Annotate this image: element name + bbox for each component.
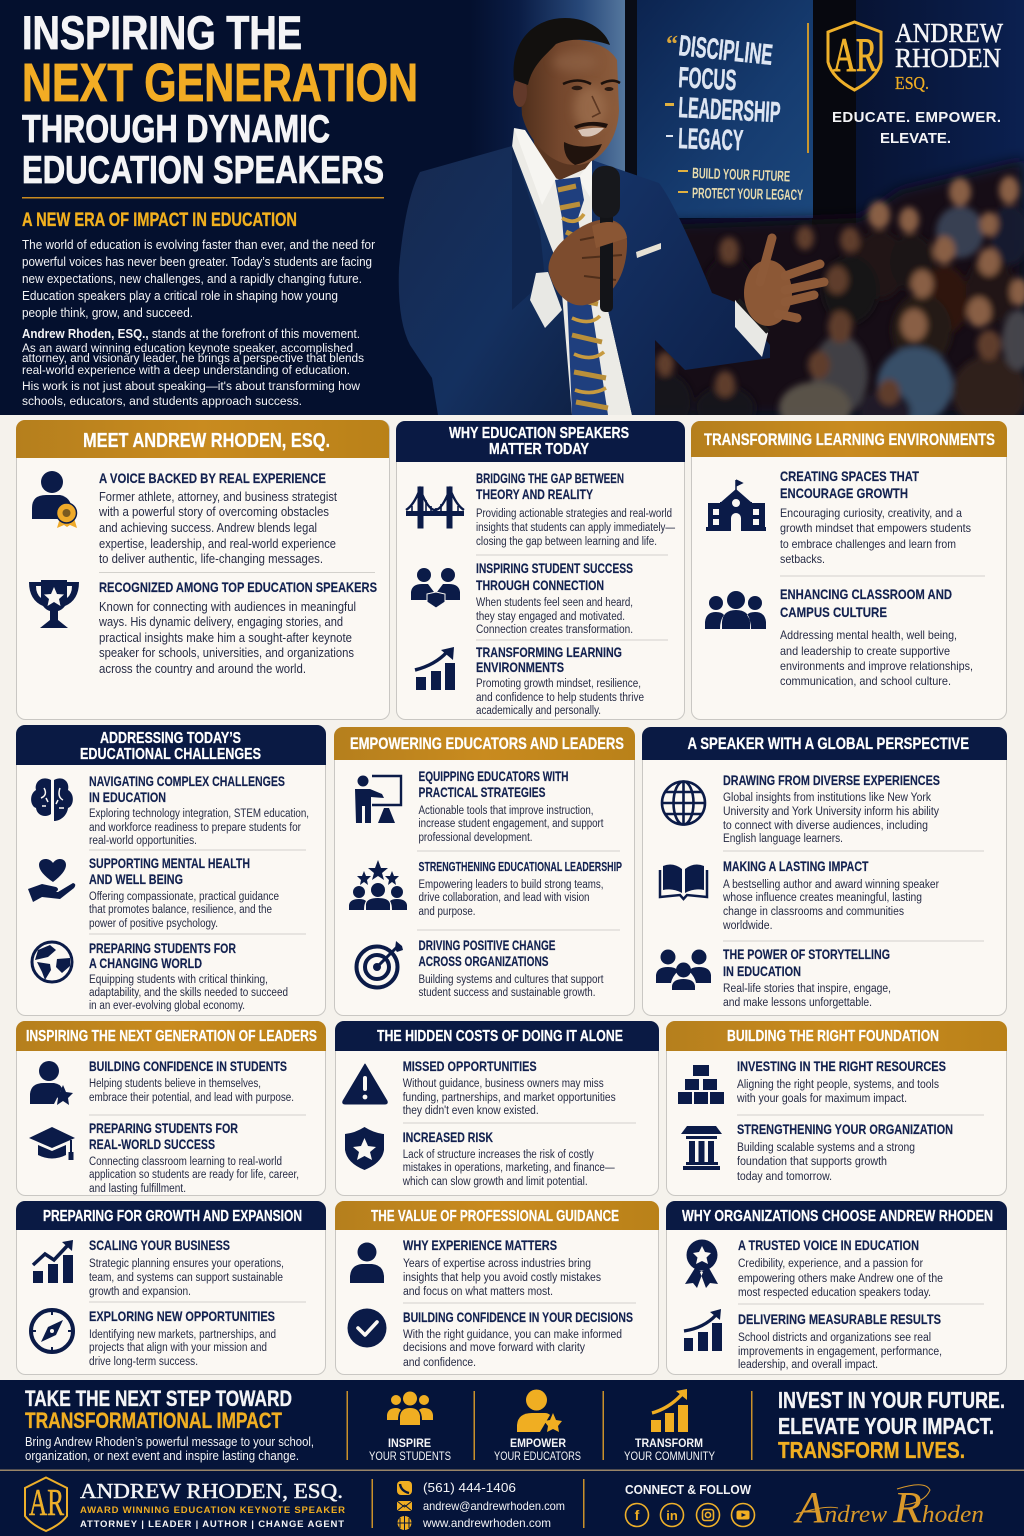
item: bridging the gap: closing the gap between learning and life. xyxy=(476,536,657,548)
item: equipping educators: EQUIPPING EDUCATORS WITH xyxy=(418,769,568,784)
item: increased risk: INCREASED RISK xyxy=(403,1130,493,1145)
item: supporting mental health xyxy=(89,856,279,930)
item: exploring new opportunities: Identifying new markets, partnerships, and xyxy=(89,1329,276,1341)
hero intro text: As an award winning education keynote speaker, accomplished xyxy=(22,341,353,355)
closing slogan: TRANSFORM LIVES. xyxy=(778,1437,965,1463)
item: navigating complex challenges: real-world opportunities. xyxy=(89,835,197,847)
item: recognized among top speakers: Known for connecting with audiences in meaningful xyxy=(99,600,356,614)
panel: addressing today's educational challenges: ADDRESSING TODAY’S xyxy=(100,730,241,747)
item: exploring new opportunities: projects that align with your mission and xyxy=(89,1342,267,1354)
item: bridging the gap: insights that students can apply immediately— xyxy=(476,522,675,534)
panel: preparing for growth and expansion: PREPARING FOR GROWTH AND EXPANSION xyxy=(43,1208,302,1225)
presentation screen: LEADERSHIP xyxy=(678,92,781,129)
item: exploring new opportunities: EXPLORING NEW OPPORTUNITIES xyxy=(89,1309,275,1324)
icon: brain xyxy=(31,778,73,821)
item: preparing for real-world success: Connecting classroom learning to real-world xyxy=(89,1156,282,1168)
item: supporting mental health: AND WELL BEING xyxy=(89,872,183,887)
title: INSPIRING THE xyxy=(22,6,302,59)
item: drawing from diverse experiences: English language learners. xyxy=(723,833,843,845)
item: strengthening your organization: today and tomorrow. xyxy=(737,1171,832,1183)
item: a voice backed by real experience: with a powerful story of overcoming obstacles xyxy=(98,505,329,519)
item: increased risk: Lack of structure increases the risk of costly xyxy=(403,1149,594,1161)
item: investing in the right resources: INVESTING IN THE RIGHT RESOURCES xyxy=(737,1059,946,1074)
item: transforming learning environments: Promoting growth mindset, resilience, xyxy=(476,678,641,690)
item: strengthening your organization: foundation that supports growth xyxy=(737,1156,887,1168)
item: strengthening educational leadership xyxy=(418,859,622,918)
item: a voice backed by real experience: to deliver authentic, life-changing messages. xyxy=(99,552,323,566)
item: the power of storytelling: and make lessons unforgettable. xyxy=(723,997,872,1009)
item: making a lasting impact: change in classrooms and communities xyxy=(723,906,904,918)
item: delivering measurable results: leadership, and overall impact. xyxy=(738,1359,878,1371)
panel: why education speakers matter today: WHY EDUCATION SPEAKERS xyxy=(449,425,629,442)
item: enhancing classroom: Addressing mental health, well being, xyxy=(780,628,957,642)
hero intro text: Education speakers play a critical role in shaping how young xyxy=(22,288,338,303)
inspire your students xyxy=(369,1392,451,1463)
item: recognized among top speakers: across the country and around the world. xyxy=(99,662,306,676)
hero intro text: Andrew Rhoden, ESQ., stands at the forefront of this movement. xyxy=(22,326,360,341)
item: making a lasting impact xyxy=(722,859,939,932)
empower your educators: YOUR EDUCATORS xyxy=(494,1449,581,1463)
item: the power of storytelling: Real-life stories that inspire, engage, xyxy=(723,983,891,995)
item: navigating complex challenges: NAVIGATING COMPLEX CHALLENGES xyxy=(89,774,285,789)
social links: in xyxy=(666,1508,678,1523)
item: creating spaces: Encouraging curiosity, creativity, and a xyxy=(780,506,962,520)
icon: three people xyxy=(705,591,766,629)
footer bar xyxy=(0,1470,1024,1536)
item: equipping educators: PRACTICAL STRATEGIES xyxy=(418,785,546,800)
brand logo block: RHODEN xyxy=(895,43,1001,73)
item: delivering measurable results: improvements in engagement, performance, xyxy=(738,1346,942,1358)
item: building confidence in your decisions: and confidence. xyxy=(403,1357,476,1369)
icon: graduation cap xyxy=(29,1127,75,1160)
inspire your students: YOUR STUDENTS xyxy=(369,1449,451,1463)
item: making a lasting impact: A bestselling author and award winning speaker xyxy=(723,879,939,891)
item: supporting mental health: power of positive psychology. xyxy=(89,918,218,930)
item: enhancing classroom: ENHANCING CLASSROOM AND xyxy=(780,586,952,602)
icon: check circle xyxy=(348,1308,386,1348)
empower your educators: EMPOWER xyxy=(510,1436,566,1450)
item: preparing students for a changing world: PREPARING STUDENTS FOR xyxy=(89,941,236,956)
panel: a speaker with a global perspective xyxy=(642,727,1007,1016)
item: recognized among top speakers: RECOGNIZED AMONG TOP EDUCATION SPEAKERS xyxy=(99,579,377,595)
item: building confidence in your decisions: BUILDING CONFIDENCE IN YOUR DECISIONS xyxy=(403,1310,633,1325)
hero intro text: new expectations, new challenges, and a rapidly changing future. xyxy=(22,271,362,286)
footer logo and name: AR xyxy=(29,1482,64,1524)
item: missed opportunities xyxy=(403,1059,616,1117)
item: why experience matters: insights that help you avoid costly mistakes xyxy=(403,1272,601,1284)
cta headline xyxy=(25,1386,314,1463)
item: bridging the gap: Providing actionable strategies and real-world xyxy=(476,508,672,520)
icon: growth chart xyxy=(415,647,455,690)
title: EDUCATION SPEAKERS xyxy=(22,149,384,192)
item: the power of storytelling: IN EDUCATION xyxy=(723,964,801,979)
cta headline: Bring Andrew Rhoden’s powerful message to your school, xyxy=(25,1435,314,1449)
item: missed opportunities: funding, partnerships, and market opportunities xyxy=(403,1092,616,1104)
item: creating spaces: setbacks. xyxy=(780,552,825,566)
panel: inspiring the next generation of leaders xyxy=(16,1021,326,1196)
item: a trusted voice in education: empowering others make Andrew one of the xyxy=(738,1273,943,1285)
footer logo and name: ATTORNEY | LEADER | AUTHOR | CHANGE AGENT xyxy=(80,1519,344,1530)
hero intro text: attorney, and visionary leader, he brings a perspective that blends xyxy=(22,351,364,365)
item: supporting mental health: SUPPORTING MENTAL HEALTH xyxy=(89,856,250,871)
item: why experience matters: and focus on what matters most. xyxy=(403,1286,553,1298)
item: delivering measurable results xyxy=(738,1312,942,1371)
icon: person with star xyxy=(30,1061,73,1105)
item: drawing from diverse experiences: to connect with diverse audiences, including xyxy=(723,820,928,832)
item: investing in the right resources: Aligning the right people, systems, and tools xyxy=(737,1079,939,1091)
item: strengthening your organization: Building scalable systems and a strong xyxy=(737,1142,915,1154)
item: preparing students for a changing world: Equipping students with critical thinking, xyxy=(89,974,268,986)
item: building confidence in students: BUILDING CONFIDENCE IN STUDENTS xyxy=(89,1059,287,1074)
item: creating spaces: CREATING SPACES THAT xyxy=(780,468,919,484)
panel: addressing today's educational challenges: EDUCATIONAL CHALLENGES xyxy=(80,746,261,763)
contact details: www.andrewrhoden.com xyxy=(422,1516,551,1530)
item: preparing for real-world success: REAL-WORLD SUCCESS xyxy=(89,1137,215,1152)
icon: person xyxy=(350,1242,384,1283)
icon: results chart xyxy=(684,1309,722,1351)
item: driving positive change: ACROSS ORGANIZATIONS xyxy=(418,954,548,969)
contact details xyxy=(397,1480,565,1530)
brand logo block: EDUCATE. EMPOWER. xyxy=(832,109,1001,126)
transform your community: TRANSFORM xyxy=(635,1436,703,1450)
panel: why organizations choose andrew rhoden xyxy=(666,1201,1007,1374)
item: building confidence in your decisions: decisions and move forward with clarity xyxy=(403,1342,585,1354)
item: missed opportunities: they didn't even know existed. xyxy=(403,1105,539,1117)
item: driving positive change: DRIVING POSITIVE CHANGE xyxy=(418,938,556,953)
panel: the hidden costs of doing it alone: THE HIDDEN COSTS OF DOING IT ALONE xyxy=(377,1028,623,1045)
icon: rising chart xyxy=(33,1240,73,1283)
item: recognized among top speakers xyxy=(98,579,377,676)
title xyxy=(22,6,418,198)
icon: compass xyxy=(31,1310,73,1352)
item: preparing for real-world success xyxy=(89,1121,299,1195)
social links: CONNECT & FOLLOW xyxy=(625,1482,752,1497)
item: investing in the right resources xyxy=(736,1059,946,1105)
speaker photo illustration xyxy=(399,18,824,415)
presentation screen: PROTECT YOUR LEGACY xyxy=(692,185,803,204)
panel: inspiring the next generation of leaders: INSPIRING THE NEXT GENERATION OF LEADERS xyxy=(26,1028,317,1045)
item: inspiring student success: INSPIRING STUDENT SUCCESS xyxy=(476,561,633,576)
icon: teacher at board xyxy=(355,776,401,823)
item: preparing for real-world success: PREPARING STUDENTS FOR xyxy=(89,1121,238,1136)
item: missed opportunities: MISSED OPPORTUNITIES xyxy=(403,1059,537,1074)
title: NEXT GENERATION xyxy=(22,53,418,113)
item: delivering measurable results: School districts and organizations see real xyxy=(738,1332,931,1344)
item: navigating complex challenges: and workforce readiness to prepare students for xyxy=(89,822,301,834)
item: drawing from diverse experiences xyxy=(723,773,940,845)
item: navigating complex challenges xyxy=(89,774,309,847)
item: why experience matters xyxy=(403,1238,601,1298)
item: drawing from diverse experiences: Global insights from institutions like New York xyxy=(723,792,931,804)
item: building confidence in students: Helping students believe in themselves, xyxy=(89,1078,261,1090)
item: a trusted voice in education: Credibility, experience, and a passion for xyxy=(738,1258,923,1270)
panel: why education speakers matter today: MATTER TODAY xyxy=(489,441,589,458)
transform your community xyxy=(624,1389,715,1463)
icon: trophy xyxy=(29,580,79,628)
item: recognized among top speakers: speaker for schools, universities, and organizations xyxy=(99,646,354,660)
item: bridging the gap: THEORY AND REALITY xyxy=(476,487,593,502)
cta headline: organization, or next event and inspire lasting change. xyxy=(25,1449,299,1463)
item: preparing for real-world success: and lasting fulfillment. xyxy=(89,1183,186,1195)
item: inspiring student success: THROUGH CONNECTION xyxy=(476,578,604,593)
item: strengthening educational leadership: STRENGTHENING EDUCATIONAL LEADERSHIP xyxy=(418,859,622,874)
item: enhancing classroom xyxy=(780,586,973,688)
item: investing in the right resources: with your goals for maximum impact. xyxy=(736,1093,907,1105)
hero banner xyxy=(0,0,1024,434)
panel: why education speakers matter today xyxy=(396,421,685,720)
audience xyxy=(640,160,1024,434)
social links xyxy=(625,1482,754,1526)
presentation screen: BUILD YOUR FUTURE xyxy=(692,165,790,185)
item: exploring new opportunities: drive long-term success. xyxy=(89,1356,198,1368)
item: driving positive change: student success and sustainable growth. xyxy=(418,987,596,999)
item: transforming learning environments: ENVIRONMENTS xyxy=(476,660,564,675)
item: navigating complex challenges: IN EDUCATION xyxy=(89,790,166,805)
panel: addressing today's educational challenges xyxy=(16,725,326,1016)
brand logo block: ANDREW xyxy=(895,18,1003,48)
icon: stacked bricks xyxy=(678,1065,724,1104)
item: equipping educators: increase student engagement, and support xyxy=(418,818,604,830)
hero intro text: real-world experience with a deep understanding of education. xyxy=(22,363,350,377)
item: strengthening your organization xyxy=(737,1122,953,1183)
item: enhancing classroom: CAMPUS CULTURE xyxy=(780,604,887,620)
presentation screen: “ xyxy=(666,32,678,58)
item: a trusted voice in education: most respected education speakers today. xyxy=(738,1287,931,1299)
item: inspiring student success xyxy=(476,561,633,636)
item: supporting mental health: that promotes balance, resilience, and the xyxy=(89,904,272,916)
item: navigating complex challenges: Exploring technology integration, STEM education, xyxy=(89,808,309,820)
item: scaling your business: growth and expansion. xyxy=(89,1286,191,1298)
footer logo and name: ANDREW RHODEN, ESQ. xyxy=(80,1479,343,1503)
item: increased risk: mistakes in operations, marketing, and finance— xyxy=(403,1162,615,1174)
item: driving positive change xyxy=(418,938,604,999)
item: making a lasting impact: whose influence creates meaningful, lasting xyxy=(722,892,922,904)
contact details: andrew@andrewrhoden.com xyxy=(423,1499,565,1513)
panel: meet andrew rhoden: MEET ANDREW RHODEN, ESQ. xyxy=(83,430,330,452)
transform your community: YOUR COMMUNITY xyxy=(624,1449,715,1463)
item: building confidence in your decisions xyxy=(403,1310,633,1369)
footer logo and name: AWARD WINNING EDUCATION KEYNOTE SPEAKER xyxy=(80,1505,345,1516)
item: scaling your business: Strategic planning ensures your operations, xyxy=(89,1258,284,1270)
item: inspiring student success: When students feel seen and heard, xyxy=(476,597,633,609)
panel: building the right foundation xyxy=(666,1021,1007,1196)
panel: the value of professional guidance: THE VALUE OF PROFESSIONAL GUIDANCE xyxy=(371,1208,619,1225)
item: a voice backed by real experience: A VOICE BACKED BY REAL EXPERIENCE xyxy=(99,470,326,486)
item: missed opportunities: Without guidance, business owners may miss xyxy=(403,1078,604,1090)
presentation screen: FOCUS xyxy=(678,62,737,97)
item: transforming learning environments xyxy=(476,645,644,717)
hero intro text: people think, grow, and succeed. xyxy=(22,305,193,320)
icon: open book xyxy=(660,865,707,899)
cta headline: TAKE THE NEXT STEP TOWARD xyxy=(25,1386,292,1411)
item: a voice backed by real experience: expertise, leadership, and real-world experience xyxy=(99,537,336,551)
social links: f xyxy=(635,1507,640,1523)
icon: connected students xyxy=(411,568,460,608)
item: strengthening your organization: STRENGTHENING YOUR ORGANIZATION xyxy=(737,1122,953,1137)
footer logo and name xyxy=(25,1478,345,1531)
item: transforming learning environments: academically and personally. xyxy=(476,705,601,717)
item: a trusted voice in education xyxy=(738,1238,943,1299)
item: the power of storytelling: THE POWER OF STORYTELLING xyxy=(723,947,890,962)
hero intro text: The world of education is evolving faster than ever, and the need for xyxy=(22,237,376,252)
icon: wire globe xyxy=(662,782,705,824)
item: preparing students for a changing world: adaptability, and the skills needed to succeed xyxy=(89,987,288,999)
icon: target xyxy=(356,941,403,988)
item: transforming learning environments: and confidence to help students thrive xyxy=(476,692,644,704)
hero intro text: A NEW ERA OF IMPACT IN EDUCATION xyxy=(22,209,297,231)
item: a voice backed by real experience: and achieving success. Andrew blends legal xyxy=(99,521,317,535)
item: supporting mental health: Offering compassionate, practical guidance xyxy=(89,891,279,903)
item: preparing students for a changing world xyxy=(89,941,288,1012)
item: why experience matters: Years of expertise across industries bring xyxy=(403,1258,591,1270)
item: building confidence in students xyxy=(89,1059,294,1104)
icon: classical temple xyxy=(681,1126,722,1170)
item: enhancing classroom: communication, and school culture. xyxy=(780,674,951,688)
closing slogan xyxy=(778,1387,1005,1463)
item: bridging the gap: BRIDGING THE GAP BETWEEN xyxy=(476,471,624,486)
item: equipping educators: professional development. xyxy=(418,832,532,844)
item: preparing students for a changing world: A CHANGING WORLD xyxy=(89,956,202,971)
cta headline: TRANSFORMATIONAL IMPACT xyxy=(25,1408,282,1433)
presentation screen: LEGACY xyxy=(678,123,744,157)
icon: group of people xyxy=(656,950,711,990)
panel: building the right foundation: BUILDING THE RIGHT FOUNDATION xyxy=(727,1028,939,1045)
signature: Andrew Rhoden xyxy=(793,1483,984,1532)
contact details: (561) 444-1406 xyxy=(423,1480,516,1495)
item: increased risk: which can slow growth and limit potential. xyxy=(402,1176,588,1188)
icon: world globe xyxy=(32,942,72,982)
item: delivering measurable results: DELIVERING MEASURABLE RESULTS xyxy=(738,1312,941,1327)
icon: leaders with stars xyxy=(349,860,407,910)
title: THROUGH DYNAMIC xyxy=(22,108,330,151)
item: drawing from diverse experiences: University and York University inform his ability xyxy=(723,806,939,818)
hero intro text xyxy=(22,209,376,408)
panel: empowering educators and leaders: EMPOWERING EDUCATORS AND LEADERS xyxy=(350,734,624,753)
icon: person with award xyxy=(32,471,77,528)
item: scaling your business xyxy=(89,1238,284,1298)
icon: shield with star xyxy=(345,1127,384,1170)
item: exploring new opportunities xyxy=(89,1309,276,1368)
item: enhancing classroom: and leadership to create supportive xyxy=(780,644,950,658)
brand logo block: ESQ. xyxy=(895,73,929,93)
item: creating spaces: ENCOURAGE GROWTH xyxy=(780,485,908,501)
item: scaling your business: team, and systems can support sustainable xyxy=(89,1272,283,1284)
item: strengthening educational leadership: Empowering leaders to build strong teams, xyxy=(418,879,604,891)
item: inspiring student success: Connection creates transformation. xyxy=(476,624,633,636)
item: preparing students for a changing world: in an ever-evolving global economy. xyxy=(89,1000,245,1012)
item: strengthening educational leadership: and purpose. xyxy=(418,906,476,918)
item: creating spaces: to embrace challenges and learn from xyxy=(780,537,956,551)
icon: award rosette xyxy=(685,1240,718,1288)
panel: preparing for growth and expansion xyxy=(16,1201,326,1374)
icon: school building xyxy=(706,480,766,531)
panel: the hidden costs of doing it alone xyxy=(335,1021,659,1196)
brand logo block: AR xyxy=(833,29,877,82)
call to action band xyxy=(0,1380,1024,1470)
item: preparing for real-world success: application so students are ready for life, career, xyxy=(89,1169,299,1181)
item: a voice backed by real experience xyxy=(98,470,337,566)
presentation screen xyxy=(637,0,813,218)
icon: warning triangle xyxy=(343,1064,387,1104)
item: equipping educators: Actionable tools that improve instruction, xyxy=(418,805,594,817)
item: transforming learning environments: TRANSFORMING LEARNING xyxy=(476,645,622,660)
item: enhancing classroom: environments and improve relationships, xyxy=(780,659,973,673)
item: driving positive change: Building systems and cultures that support xyxy=(418,974,604,986)
item: the power of storytelling xyxy=(723,947,891,1009)
item: building confidence in your decisions: With the right guidance, you can make informed xyxy=(403,1329,622,1341)
panel: the value of professional guidance xyxy=(335,1201,659,1374)
item: recognized among top speakers: ways. His dynamic delivery, engaging stories, and xyxy=(98,615,343,629)
hero intro text: schools, educators, and students approach success. xyxy=(22,394,302,408)
item: creating spaces xyxy=(780,468,971,566)
item: creating spaces: growth mindset that empowers students xyxy=(780,521,971,535)
brand logo block xyxy=(807,18,1003,153)
inspire your students: INSPIRE xyxy=(388,1436,431,1450)
icon: bridge xyxy=(406,488,464,527)
empower your educators xyxy=(494,1390,581,1463)
item: a trusted voice in education: A TRUSTED VOICE IN EDUCATION xyxy=(738,1238,919,1253)
icon: heart in hand xyxy=(28,859,75,902)
item: making a lasting impact: MAKING A LASTING IMPACT xyxy=(723,859,869,874)
hero intro text: powerful voices has never been greater. Today’s students are facing xyxy=(22,254,372,269)
item: bridging the gap xyxy=(476,471,675,548)
item: a voice backed by real experience: Former athlete, attorney, and business strategist xyxy=(99,490,337,504)
item: why experience matters: WHY EXPERIENCE MATTERS xyxy=(403,1238,557,1253)
item: inspiring student success: they stay engaged and motivated. xyxy=(476,611,625,623)
item: recognized among top speakers: practical insights make him a sought-after keynote xyxy=(99,631,352,645)
presentation screen: DISCIPLINE xyxy=(677,30,774,72)
panel: transforming learning environments xyxy=(691,421,1007,720)
item: building confidence in students: embrace their potential, and lead with purpose. xyxy=(89,1092,294,1104)
panel: empowering educators and leaders xyxy=(334,727,635,1016)
item: increased risk xyxy=(402,1130,615,1188)
item: making a lasting impact: worldwide. xyxy=(722,920,772,932)
brand logo block: ELEVATE. xyxy=(880,130,951,147)
item: strengthening educational leadership: drive collaboration, and lead with vision xyxy=(418,892,590,904)
panel: meet andrew rhoden xyxy=(16,420,390,720)
item: scaling your business: SCALING YOUR BUSINESS xyxy=(89,1238,230,1253)
item: drawing from diverse experiences: DRAWING FROM DIVERSE EXPERIENCES xyxy=(723,773,940,788)
item: equipping educators xyxy=(418,769,604,844)
hero intro text: His work is not just about speaking—it's about transforming how xyxy=(22,379,360,393)
